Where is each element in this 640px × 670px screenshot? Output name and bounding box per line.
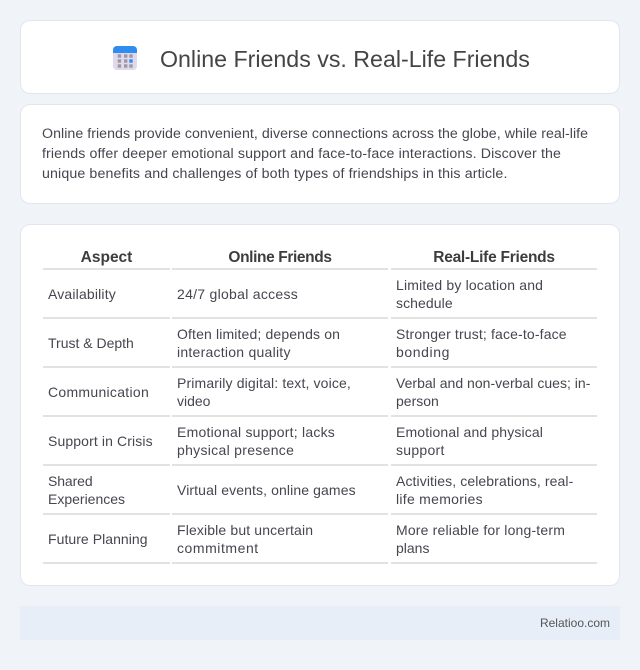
row: future planning: plans	[396, 540, 429, 556]
intro text: friends offer deeper emotional support and face-to-face interactions. Discover the	[42, 146, 561, 162]
row: communication	[48, 375, 590, 409]
row: shared experiences	[48, 473, 573, 507]
row: communication: person	[396, 393, 439, 409]
row: trust and depth	[48, 326, 567, 360]
row: availability	[48, 277, 543, 311]
row: trust and depth: interaction quality	[177, 344, 291, 360]
footer brand: Relatioo.com	[540, 616, 610, 630]
row: communication: Communication	[48, 384, 149, 400]
row: communication: video	[177, 393, 210, 409]
row: support in crisis: Emotional and physical	[396, 424, 543, 440]
table header: Online Friends	[228, 249, 332, 266]
row: support in crisis: physical presence	[177, 442, 294, 458]
title panel	[20, 20, 620, 94]
panel: comparison table	[20, 224, 620, 586]
row: trust and depth: Stronger trust; face-to-face	[396, 326, 567, 342]
table header: Real-Life Friends	[433, 249, 555, 266]
icon: calendar	[113, 46, 137, 70]
row: trust and depth: bonding	[396, 344, 450, 360]
row: availability: schedule	[396, 295, 453, 311]
row: future planning	[48, 522, 565, 556]
row: availability: Availability	[48, 286, 116, 302]
row: future planning: More reliable for long-term	[396, 522, 565, 538]
row: shared experiences: Experiences	[48, 491, 125, 507]
row: support in crisis: support	[396, 442, 445, 458]
intro text: unique benefits and challenges of both types of friendships in this article.	[42, 166, 508, 182]
row: availability: Limited by location and	[396, 277, 543, 293]
row: shared experiences: Activities, celebrations, real-	[396, 473, 573, 489]
row: future planning: commitment	[177, 540, 259, 556]
row: communication: Primarily digital: text, voice,	[177, 375, 351, 391]
row: support in crisis	[48, 424, 543, 458]
row: availability: 24/7 global access	[177, 286, 298, 302]
footer bar	[20, 606, 620, 640]
row: support in crisis: Support in Crisis	[48, 433, 153, 449]
title: Online Friends vs. Real-Life Friends	[160, 46, 530, 72]
row: shared experiences: Shared	[48, 473, 93, 489]
row: future planning: Flexible but uncertain	[177, 522, 313, 538]
row: shared experiences: life memories	[396, 491, 483, 507]
row: communication: Verbal and non-verbal cues; in-	[396, 375, 590, 391]
row: support in crisis: Emotional support; lacks	[177, 424, 335, 440]
row: trust and depth: Trust & Depth	[48, 335, 134, 351]
row: future planning: Future Planning	[48, 531, 148, 547]
intro text: Online friends provide convenient, diverse connections across the globe, while real-life	[42, 126, 588, 142]
row: trust and depth: Often limited; depends on	[177, 326, 340, 342]
row: shared experiences: Virtual events, online games	[177, 482, 356, 498]
table header: Aspect	[81, 249, 132, 266]
panel: introduction	[20, 104, 620, 204]
intro text	[42, 126, 588, 182]
table header	[81, 249, 555, 266]
